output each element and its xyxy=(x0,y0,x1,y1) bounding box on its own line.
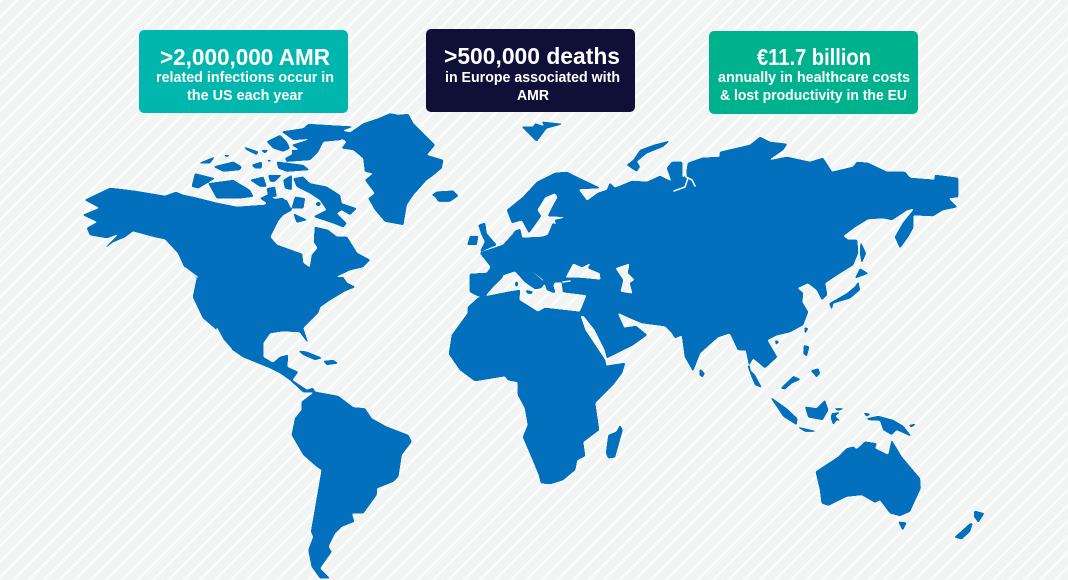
callout: Europe deaths xyxy=(426,29,635,112)
callout: EU costs xyxy=(709,31,918,114)
map: Mediterranean islands xyxy=(515,281,555,294)
callout: US infections: the US each year xyxy=(187,87,303,104)
map: sea inlets xyxy=(185,166,695,349)
callout: Europe deaths: >500,000 deaths xyxy=(444,43,620,69)
callout: EU costs: €11.7 billion xyxy=(757,44,871,70)
map: Madagascar xyxy=(606,425,623,458)
world map xyxy=(83,113,984,578)
map: Caribbean islands xyxy=(298,351,338,365)
map: British Isles and Svalbard xyxy=(467,122,563,252)
map: Greenland and Iceland xyxy=(342,113,458,225)
map: Eurasia and Africa xyxy=(449,137,958,484)
callout: EU costs: & lost productivity in the EU xyxy=(720,87,907,104)
map: Southeast Asia and Oceania islands xyxy=(748,368,917,437)
map: New Zealand xyxy=(954,511,984,539)
map: North America mainland xyxy=(83,188,370,392)
callout: US infections: related infections occur in xyxy=(156,69,334,86)
map: Novaya Zemlya and East Asian islands xyxy=(627,141,868,377)
callout: Europe deaths: in Europe associated with xyxy=(445,69,620,86)
map: South America xyxy=(292,392,412,578)
callout: US infections xyxy=(139,30,348,113)
callout: EU costs: annually in healthcare costs xyxy=(718,69,910,86)
map: Canadian Arctic islands xyxy=(192,124,357,227)
map: Australia xyxy=(816,440,921,531)
callout: Europe deaths: AMR xyxy=(517,87,549,104)
callout: US infections: >2,000,000 AMR xyxy=(160,44,330,70)
